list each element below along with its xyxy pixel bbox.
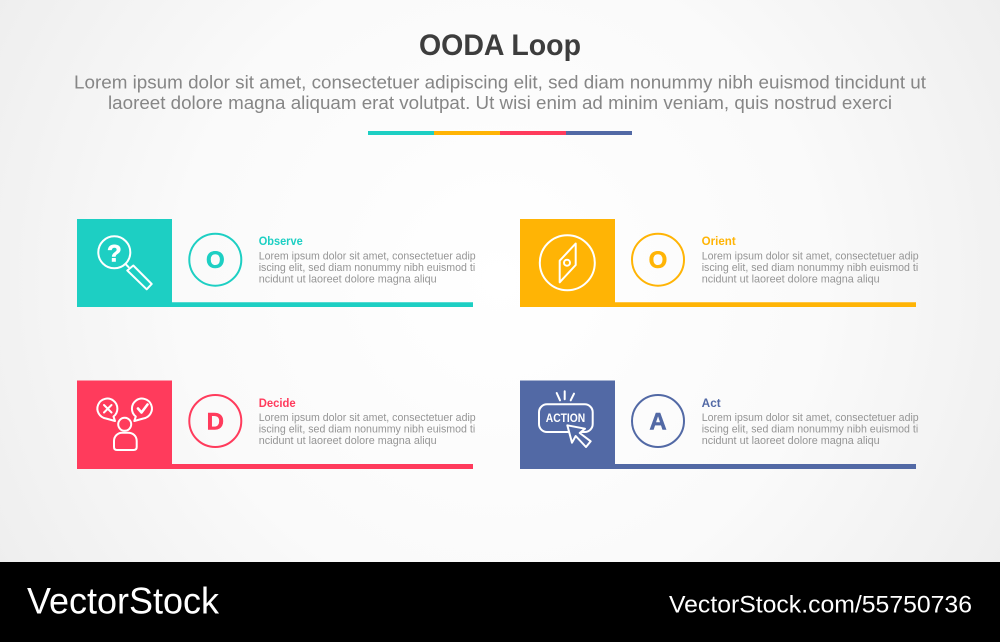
icon: magnifier with question mark bbox=[98, 236, 152, 289]
icon: compass bbox=[540, 235, 595, 290]
letter circle bbox=[632, 395, 684, 447]
icon block bbox=[520, 380, 916, 469]
text block: iscing elit, sed diam nonummy nibh euismod ti bbox=[702, 262, 918, 274]
footer bar bbox=[0, 562, 1000, 642]
icon block bbox=[520, 219, 916, 307]
text block: Lorem ipsum dolor sit amet, consectetuer adip bbox=[702, 250, 919, 262]
text block: Observe bbox=[259, 236, 303, 248]
text block bbox=[259, 236, 476, 286]
title: OODA Loop bbox=[419, 29, 581, 62]
panel: act bbox=[520, 380, 919, 469]
subtitle bbox=[74, 72, 926, 113]
text block: Decide bbox=[259, 398, 296, 410]
panel: decide bbox=[77, 380, 476, 469]
panel: observe bbox=[77, 219, 476, 307]
text block: Act bbox=[702, 398, 721, 410]
text block: ncidunt ut laoreet dolore magna aliqu bbox=[259, 274, 437, 286]
letter circle bbox=[189, 395, 241, 447]
icon: action button with cursor bbox=[539, 391, 593, 447]
icon block bbox=[77, 219, 473, 307]
footer brand: VectorStock bbox=[27, 580, 219, 622]
subtitle: laoreet dolore magna aliquam erat volutpat. Ut wisi enim ad minim veniam, quis nostrud exerci bbox=[108, 92, 892, 113]
footer image id: VectorStock.com/55750736 bbox=[669, 592, 972, 618]
icon block bbox=[77, 380, 473, 469]
letter circle bbox=[632, 234, 684, 286]
panel: orient bbox=[520, 219, 919, 307]
text block: ncidunt ut laoreet dolore magna aliqu bbox=[702, 435, 880, 447]
text block: Lorem ipsum dolor sit amet, consectetuer adip bbox=[259, 412, 476, 424]
text block: Lorem ipsum dolor sit amet, consectetuer adip bbox=[702, 412, 919, 424]
text block: iscing elit, sed diam nonummy nibh euismod ti bbox=[259, 424, 475, 436]
icon: person choosing between cross and check bbox=[97, 399, 152, 450]
letter circle: A bbox=[649, 408, 667, 436]
text block: iscing elit, sed diam nonummy nibh euismod ti bbox=[259, 262, 475, 274]
colour divider bbox=[368, 131, 632, 135]
icon: magnifier with question mark: ? bbox=[107, 240, 122, 268]
text block bbox=[259, 398, 476, 447]
text block: Lorem ipsum dolor sit amet, consectetuer adip bbox=[259, 250, 476, 262]
text block: iscing elit, sed diam nonummy nibh euismod ti bbox=[702, 424, 918, 436]
subtitle: Lorem ipsum dolor sit amet, consectetuer adipiscing elit, sed diam nonummy nibh euismod tincidunt ut bbox=[74, 72, 926, 92]
icon: action button with cursor: ACTION bbox=[546, 413, 585, 425]
letter circle: O bbox=[649, 247, 667, 274]
text block: ncidunt ut laoreet dolore magna aliqu bbox=[259, 435, 437, 447]
text block: ncidunt ut laoreet dolore magna aliqu bbox=[702, 274, 880, 286]
text block bbox=[702, 236, 919, 286]
letter circle: D bbox=[207, 408, 224, 436]
text block bbox=[702, 398, 919, 447]
letter circle bbox=[189, 234, 241, 286]
letter circle: O bbox=[206, 247, 225, 274]
text block: Orient bbox=[702, 236, 736, 248]
